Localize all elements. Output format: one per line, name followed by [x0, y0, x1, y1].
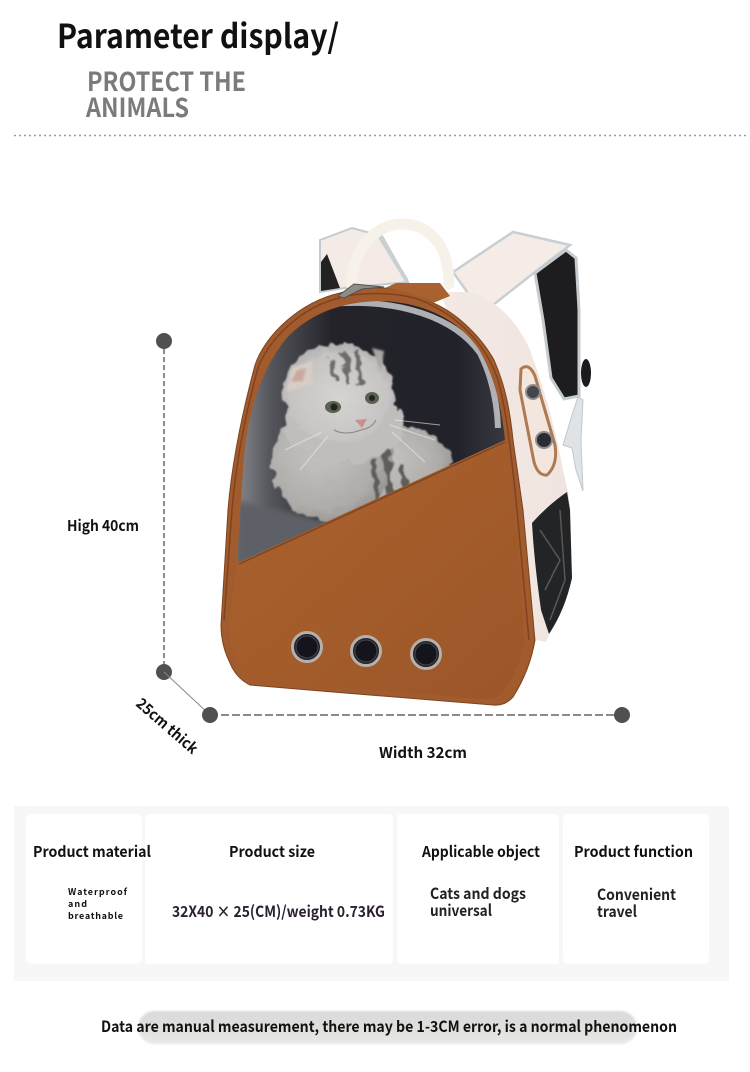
panel: product parameters [14, 806, 729, 981]
title: Parameter display/ [57, 10, 339, 58]
mesh pocket [532, 492, 572, 634]
leather front panel [229, 440, 524, 699]
right strap [453, 232, 591, 491]
side eyelet strip [520, 367, 556, 475]
handle [351, 224, 449, 284]
card: product material: breathable [68, 909, 123, 922]
backpack illustration [221, 224, 591, 705]
brown body [221, 288, 535, 705]
card: product function: Convenient [597, 883, 676, 905]
card: applicable object: Applicable object [421, 841, 541, 862]
dimension: width [202, 707, 630, 763]
subtitle [85, 62, 246, 125]
dimension: thickness: 25cm thick [132, 693, 203, 759]
card: applicable object: universal [430, 899, 492, 921]
side panel [440, 292, 572, 642]
card: applicable object: Cats and dogs [430, 882, 526, 904]
subtitle: PROTECT THE [87, 62, 246, 99]
card: product material: Waterproof [68, 885, 128, 898]
left strap [320, 228, 408, 292]
card: product function [563, 814, 709, 964]
card: product material [26, 814, 151, 964]
card: product size: 32X40 × 25(CM)/weight 0.73KG [172, 900, 385, 922]
disclaimer note: Data are manual measurement, there may be 1-3CM error, is a normal phenomenon [101, 1015, 677, 1037]
card: product material: Product material [33, 841, 151, 862]
subtitle: ANIMALS [85, 88, 189, 125]
card: applicable object [397, 814, 559, 964]
dimension: height [67, 333, 172, 680]
cat [272, 343, 452, 522]
dimension: height: High 40cm [67, 515, 139, 536]
air holes [292, 632, 440, 668]
card: product size [145, 814, 393, 964]
cat face [285, 392, 440, 470]
brown handle base [385, 283, 450, 303]
card: product size: Product size [229, 841, 315, 862]
disclaimer note [101, 1011, 677, 1044]
card: product function: travel [597, 900, 637, 922]
card: product function: Product function [574, 841, 693, 862]
card: product material: and [68, 897, 87, 910]
clear window [237, 301, 505, 563]
dimension: width: Width 32cm [379, 742, 467, 763]
zipper pull [338, 284, 384, 298]
